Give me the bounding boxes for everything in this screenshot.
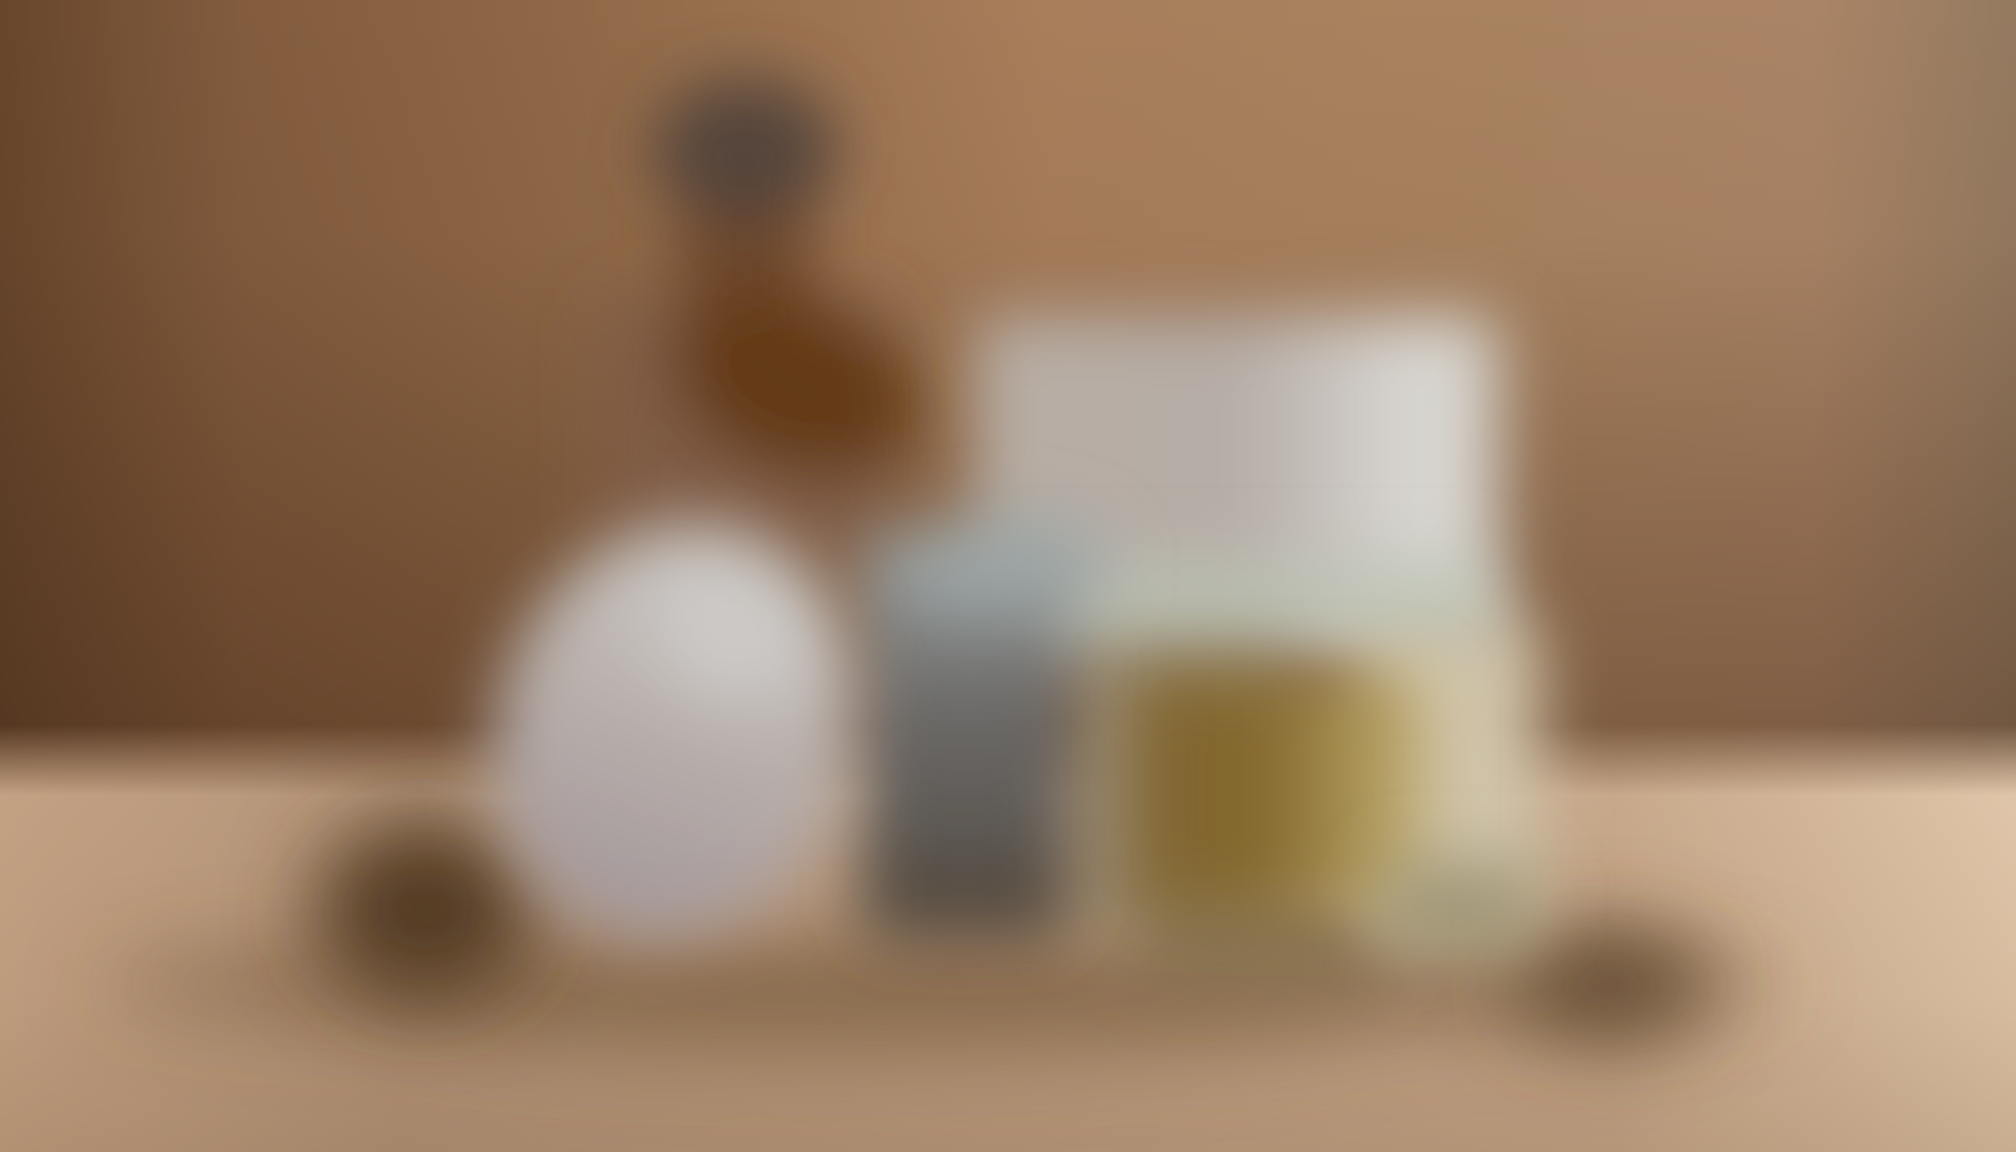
wooden table surface [0, 700, 2016, 1152]
bottle shoulder haze [600, 300, 890, 560]
shadow: right scattered object [1510, 933, 1710, 1037]
large white jar [975, 315, 1500, 655]
pale jar base [1000, 560, 1540, 980]
table shadow band [100, 943, 1780, 1055]
right jar column [1360, 620, 1540, 920]
bottle neck [680, 180, 810, 380]
grey canister [860, 515, 1110, 940]
oval highlight [655, 560, 815, 700]
shadow: left scattered object [315, 820, 535, 1000]
jar tint [1000, 560, 1490, 640]
white oval container [436, 472, 914, 988]
bottle dropper cap [653, 78, 837, 222]
canister top highlight [890, 515, 1110, 615]
yellow glass jar [1135, 675, 1425, 910]
amber bottle [600, 78, 942, 560]
jar bottom under glass [1140, 900, 1380, 980]
base of pale jar [1385, 860, 1535, 960]
bottle body [648, 262, 942, 508]
